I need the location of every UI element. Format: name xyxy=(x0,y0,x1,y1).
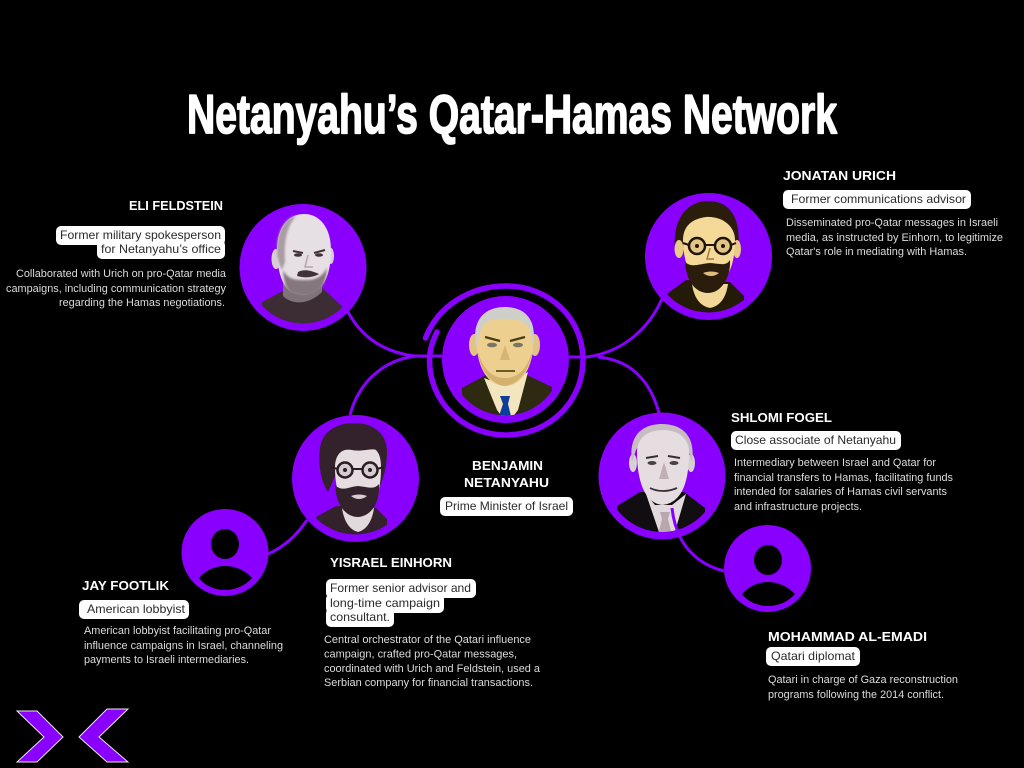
name: SHLOMI FOGEL xyxy=(731,410,832,425)
role label xyxy=(79,600,189,619)
description xyxy=(734,457,954,513)
description: influence campaigns in Israel, channeling xyxy=(84,640,283,652)
role label: Former communications advisor xyxy=(791,192,966,206)
icon: person placeholder xyxy=(182,509,268,596)
portrait: Yisrael Einhorn xyxy=(292,415,419,542)
panel: Benjamin Netanyahu xyxy=(440,296,573,516)
description: programs following the 2014 conflict. xyxy=(768,689,944,701)
role label: consultant. xyxy=(330,610,390,624)
description: and infrastructure projects. xyxy=(734,501,862,513)
role label xyxy=(783,190,971,209)
description xyxy=(6,268,227,309)
portrait: Shlomi Fogel xyxy=(598,412,726,540)
Netanyahu spiral ring xyxy=(426,286,583,435)
role label: Former senior advisor and xyxy=(330,581,471,595)
description: campaigns, including communication strategy xyxy=(6,283,227,295)
description: media, as instructed by Einhorn, to legitimize xyxy=(786,232,1003,244)
description: Qatari in charge of Gaza reconstruction xyxy=(768,674,958,686)
portrait: Netanyahu xyxy=(442,296,569,423)
role label: Former military spokesperson xyxy=(60,228,221,242)
connector: Jay Footlik to Einhorn xyxy=(268,520,307,554)
icon: person placeholder xyxy=(724,525,811,612)
portrait: Jonatan Urich xyxy=(645,193,772,320)
role label: Prime Minister of Israel xyxy=(445,499,568,513)
connector: Yisrael Einhorn to Netanyahu xyxy=(350,356,416,415)
description: Intermediary between Israel and Qatar for xyxy=(734,457,936,469)
role label: Qatari diplomat xyxy=(771,649,856,663)
description xyxy=(84,625,283,666)
name: JONATAN URICH xyxy=(783,168,896,183)
name: ELI FELDSTEIN xyxy=(129,198,223,213)
description: coordinated with Urich and Feldstein, used a xyxy=(324,663,540,675)
name: NETANYAHU xyxy=(464,475,549,490)
role label xyxy=(326,579,476,627)
name: MOHAMMAD AL-EMADI xyxy=(768,629,927,644)
panel: Jay Footlik xyxy=(79,509,283,666)
panel: Shlomi Fogel xyxy=(598,410,954,540)
description: intended for salaries of Hamas civil servants xyxy=(734,486,948,498)
connector: Eli Feldstein to Netanyahu xyxy=(348,312,442,356)
panel: Mohammad Al-Emadi xyxy=(724,525,958,701)
description xyxy=(324,634,540,689)
description: Qatar's role in mediating with Hamas. xyxy=(786,246,967,258)
name: BENJAMIN xyxy=(472,458,543,473)
name: YISRAEL EINHORN xyxy=(330,555,452,570)
role label: for Netanyahu’s office xyxy=(101,242,221,256)
name xyxy=(464,458,549,490)
description: financial transfers to Hamas, facilitating funds xyxy=(734,472,954,484)
description xyxy=(786,217,1003,258)
connector: Al-Emadi to Fogel xyxy=(672,508,724,571)
panel: Jonatan Urich xyxy=(645,168,1003,320)
description: regarding the Hamas negotiations. xyxy=(59,297,225,309)
role label: American lobbyist xyxy=(87,602,186,616)
panel: Yisrael Einhorn xyxy=(292,415,540,689)
description: campaign, crafted pro-Qatar messages, xyxy=(324,648,517,660)
role label xyxy=(766,647,860,666)
role label: Close associate of Netanyahu xyxy=(735,433,896,447)
description: Disseminated pro-Qatar messages in Israeli xyxy=(786,217,998,229)
description: payments to Israeli intermediaries. xyxy=(84,654,249,666)
role label xyxy=(440,497,573,516)
role label: long-time campaign xyxy=(330,596,440,610)
logo: chevrons xyxy=(17,709,128,762)
connector: Jonatan Urich to Netanyahu xyxy=(569,299,662,357)
description: Central orchestrator of the Qatari influence xyxy=(324,634,531,646)
description: American lobbyist facilitating pro-Qatar xyxy=(84,625,271,637)
description: Collaborated with Urich on pro-Qatar media xyxy=(16,268,226,280)
portrait: Eli Feldstein xyxy=(240,204,366,331)
connector: Shlomi Fogel to Netanyahu xyxy=(598,357,659,413)
description: Serbian company for financial transactions. xyxy=(324,677,533,689)
name: JAY FOOTLIK xyxy=(82,578,170,593)
role label xyxy=(731,431,901,450)
role label xyxy=(56,226,225,259)
description xyxy=(768,674,958,701)
panel: Eli Feldstein xyxy=(6,198,366,331)
